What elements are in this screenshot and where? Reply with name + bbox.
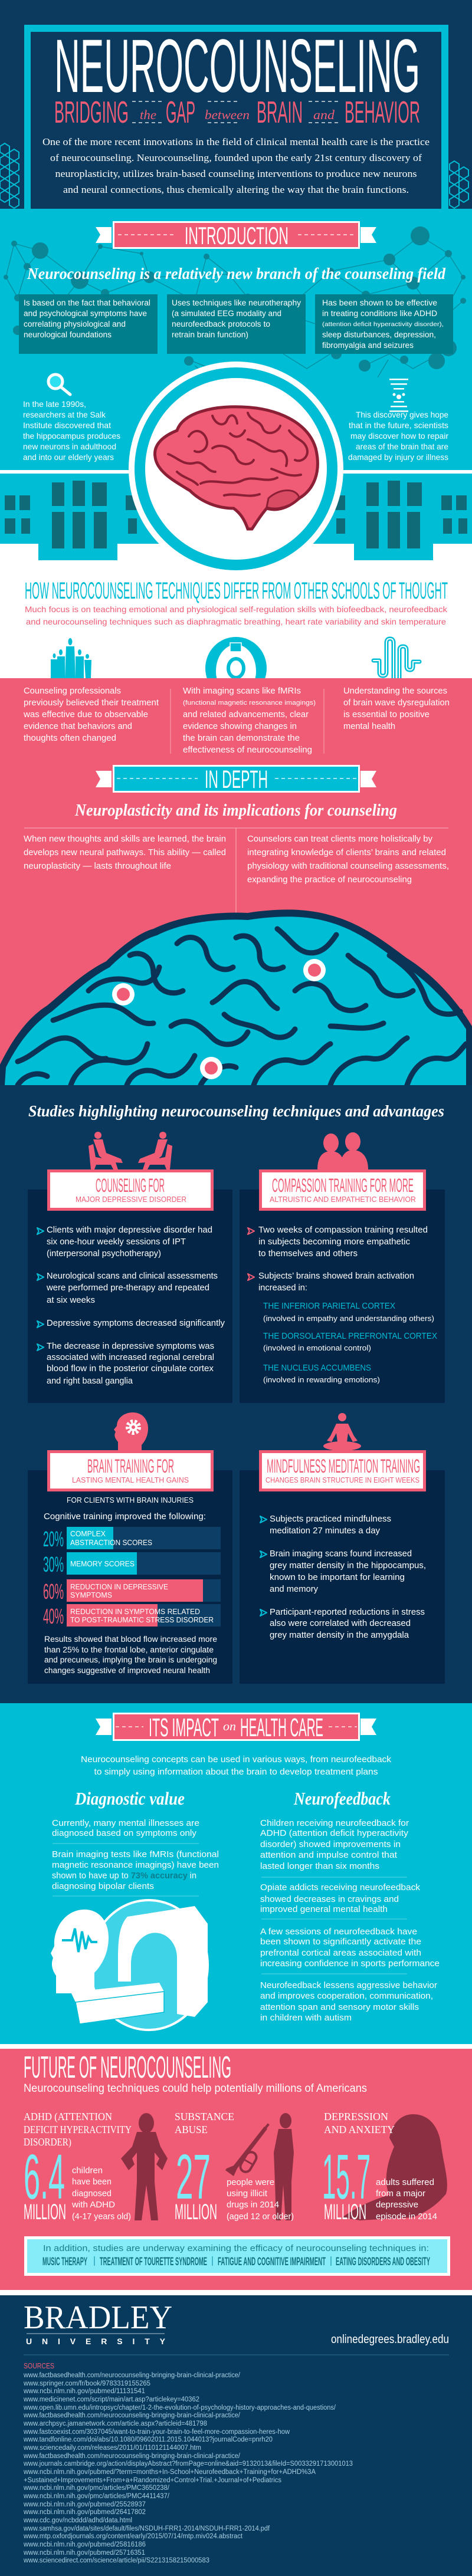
column: neurofeedback: disorder) showed improvements in [260, 1840, 401, 1849]
banner: its impact on health care [96, 1713, 376, 1742]
panel: counseling for major depressive disorder: COUNSELING FOR [96, 1175, 165, 1196]
sources list: www.archpsyc.jamanetwork.com/article.aspx?articleid=481798 [23, 2420, 207, 2427]
intro box 2: Uses techniques like neurotheraphy [172, 298, 301, 307]
panel: counseling for major depressive disorder: Clients with major depressive disorder had [47, 1225, 212, 1235]
text: salk institute: and into our elderly years [23, 452, 114, 462]
intro paragraph: of neurocounseling. Neurocounseling, founded upon the early 21st century discovery of [50, 152, 422, 163]
panel: brain training: LASTING MENTAL HEALTH GAINS [72, 1476, 189, 1484]
callout: studies underway: TREATMENT OF TOURETTE SYNDROME [100, 2256, 207, 2268]
sources list: www.fastcoexist.com/3037045/want-to-train-your-brain-to-feel-more-compassion-heres-how [23, 2429, 290, 2436]
sources list: www.ncbi.nlm.nih.gov/pmc/articles/PMC4411437/ [23, 2493, 170, 2500]
column: neurofeedback: lasted longer than six months [260, 1862, 379, 1871]
intro box 3 [315, 294, 453, 354]
impact intro text: Neurocounseling concepts can be used in various ways, from neurofeedback [81, 1755, 392, 1765]
intro box 2 [167, 294, 306, 354]
column: previously believed: thoughts often changed [24, 734, 116, 743]
panel: compassion training: in subjects becoming more empathetic [258, 1237, 410, 1247]
intro box 3: in treating conditions like ADHD [322, 309, 437, 318]
banner: its impact on health care: on [223, 1720, 236, 1733]
sources list: www.sciencedaily.com/releases/2011/01/110121144007.htm [23, 2444, 201, 2452]
intro box 2: retrain brain function) [172, 330, 248, 339]
sources list: www.cdc.gov/ncbddd/adhd/data.html [23, 2517, 132, 2524]
stat: depression and anxiety: adults suffered [376, 2177, 434, 2187]
subtitle: self-regulation skills [25, 604, 448, 626]
banner: its impact on health care: HEALTH CARE [240, 1713, 323, 1742]
sources list: www.ncbi.nlm.nih.gov/pubmed/25816186 [23, 2541, 146, 2548]
callout: studies underway: In addition, studies are underway examining the efficacy of neurocounseling techniques in: [43, 2243, 429, 2253]
text: salk institute: Institute discovered that [23, 420, 111, 430]
text: discovery gives hope: This discovery gives hope [356, 410, 448, 419]
stat: depression and anxiety [322, 2111, 447, 2224]
future section background [0, 2044, 472, 2290]
panel: counseling for major depressive disorder: blood flow in the posterior cingulate cortex [47, 1364, 214, 1374]
brain circle with pink brain [129, 362, 343, 576]
subtitle: bridging the gap between brain and behavior: BRIDGING [54, 96, 129, 130]
panel: brain training: BRAIN TRAINING FOR [87, 1455, 174, 1477]
subtitle: bridging the gap between brain and behavior: and [313, 107, 335, 122]
icon: brain wave [373, 639, 419, 678]
text: discovery gives hope: may discover how to repair [350, 431, 448, 441]
panel: mindfulness meditation: also were correlated with decreased [270, 1619, 411, 1628]
panel: compassion training: THE DORSOLATERAL PREFRONTAL CORTEX [263, 1331, 437, 1341]
panel: mindfulness meditation [240, 1413, 445, 1684]
column: neurofeedback: Children receiving neurofeedback for [260, 1819, 409, 1828]
bar chart: cognitive training results: 40% [43, 1604, 64, 1628]
stat: substance abuse: 27 [176, 2141, 211, 2212]
column: neurofeedback: ADHD (attention deficit hyperactivity [260, 1829, 409, 1838]
intro paragraph: One of the more recent innovations in the field of clinical mental health care is the practice [42, 136, 430, 147]
stat: substance abuse: SUBSTANCE [175, 2111, 234, 2122]
bar chart: cognitive training results: SYMPTOMS [70, 1591, 112, 1599]
sources list: www.sciencedirect.com/science/article/pii/S2213158215000583 [23, 2557, 209, 2564]
panel: brain training: Results showed that blood flow increased more [44, 1635, 217, 1644]
subtitle: self-regulation skills: Much focus is on teaching emotional and physiological self-regulation skills with biofeedback, neurofeedback [25, 604, 448, 614]
intro box 2: (a simulated EEG modality and [172, 309, 281, 318]
panel: compassion training: ALTRUISTIC AND EMPATHETIC BEHAVIOR [270, 1195, 416, 1204]
column: neurofeedback: A few sessions of neurofeedback have [260, 1927, 417, 1937]
panel: counseling for major depressive disorder: MAJOR DEPRESSIVE DISORDER [76, 1195, 186, 1204]
text: salk institute: In the late 1990s, [23, 399, 86, 409]
panel: compassion training: Two weeks of compassion training resulted [258, 1225, 428, 1235]
subtitle: bridging the gap between brain and behavior: GAP [166, 96, 195, 130]
intro box 2: neurofeedback protocols to [172, 320, 270, 328]
subtitle: bridging the gap between brain and behavior [54, 96, 420, 130]
icon: group of people [51, 638, 91, 678]
text: salk institute: the hippocampus produces [23, 431, 120, 441]
subtitle: self-regulation skills: and neurocounseling techniques such as diaphragmatic breathing, heart rate variability and skin temperature [26, 617, 446, 626]
column: neurofeedback: showed decreases in cravings and [260, 1895, 399, 1904]
intro box 3: sleep disturbances, depression, [322, 330, 436, 339]
panel: compassion training: increased in: [258, 1283, 307, 1293]
studies section background [0, 1085, 472, 1703]
stat: adhd: 6.4 [24, 2141, 65, 2212]
icon: magnifying glass [48, 374, 70, 395]
sources list: www.medicinenet.com/script/main/art.asp?articlekey=40362 [23, 2396, 199, 2403]
bar chart: cognitive training results: 30% [43, 1552, 64, 1576]
sources list: www.ncbi.nlm.nih.gov/pmc/articles/PMC3650238/ [23, 2485, 170, 2492]
sources list: www.factbasedhealth.com/neurocounseling-bringing-brain-clinical-practice/ [23, 2372, 241, 2379]
panel: compassion training: THE NUCLEUS ACCUMBENS [263, 1363, 371, 1373]
panel: mindfulness meditation: known to be important for learning [270, 1573, 405, 1582]
panel: compassion training: Subjects’ brains showed brain activation [258, 1271, 414, 1281]
bar chart: cognitive training results: ABSTRACTION SCORES [70, 1538, 152, 1547]
column: imaging scans: With imaging scans like fMRIs [183, 686, 301, 696]
text: discovery gives hope: damaged by injury or illness [348, 452, 448, 462]
stat: adhd: ADHD (ATTENTION [24, 2111, 112, 2123]
stat: adhd: DEFICIT HYPERACTIVITY [24, 2124, 132, 2135]
panel: counseling for major depressive disorder: at six weeks [47, 1296, 95, 1305]
bar chart: cognitive training results: 20% [43, 1527, 64, 1551]
column: imaging scans [183, 686, 316, 755]
text: neural pathways [24, 834, 226, 871]
column: diagnostic value [52, 1788, 219, 1896]
sources list: www.factbasedhealth.com/neurocounseling-bringing-brain-clinical-practice/ [23, 2453, 241, 2460]
column: brain wave dysregulation: Understanding the sources [343, 686, 447, 696]
bar chart: cognitive training results: TO POST-TRAUMATIC STRESS DISORDER [70, 1615, 214, 1624]
bar chart: cognitive training results: COMPLEX [70, 1529, 106, 1538]
text: holistic treatment: physiology with traditional counseling assessments, [247, 862, 449, 871]
panel: brain training [28, 1412, 232, 1684]
stat: adhd [24, 2111, 168, 2224]
panel: counseling for major depressive disorder: and right basal ganglia [47, 1376, 133, 1386]
icon: head with gear [114, 1412, 148, 1450]
panel: compassion training: (involved in emotional control) [263, 1343, 371, 1352]
column: diagnostic value: diagnosing bipolar clients [52, 1882, 154, 1891]
intro box 3: fibromyalgia and seizures [322, 341, 414, 350]
intro box 3: (attention deficit hyperactivity disorder), [322, 321, 444, 328]
buildings band and divider [0, 470, 472, 573]
header: background [0, 0, 472, 210]
stat: adhd: diagnosed [72, 2189, 112, 2199]
intro heading: Neurocounseling is a relatively new branch of the counseling field [27, 265, 445, 282]
big brain illustration [0, 909, 472, 1085]
illustration: mri scanner with head [51, 1900, 208, 2030]
column: neurofeedback: and improves cooperation, communication, [260, 1992, 433, 2001]
column: previously believed: evidence that behaviors and [24, 722, 132, 731]
panel: counseling for major depressive disorder: Depressive symptoms decreased significantly [47, 1319, 225, 1328]
column: imaging scans: evidence showing changes in [183, 722, 297, 731]
stat: adhd: (4-17 years old) [72, 2212, 131, 2222]
bar chart: cognitive training results [43, 1527, 221, 1628]
panel: mindfulness meditation: grey matter density in the hippocampus, [270, 1561, 426, 1570]
impact intro text [81, 1755, 392, 1777]
column: brain wave dysregulation: is essential to positive [343, 710, 430, 719]
stat: substance abuse: people were [227, 2177, 274, 2187]
studies heading: Studies highlighting neurocounseling techniques and advantages [28, 1102, 444, 1120]
text: holistic treatment [247, 834, 449, 885]
banner: in depth [96, 765, 376, 794]
column: neurofeedback: attention and impulse control that [260, 1851, 397, 1860]
text: salk institute [23, 399, 120, 462]
stat: adhd: MILLION [24, 2200, 66, 2224]
icon: mri scanner [205, 637, 267, 699]
bar chart: cognitive training results: MEMORY SCORES [70, 1559, 135, 1568]
panel: counseling for major depressive disorder: (interpersonal psychotherapy) [47, 1249, 161, 1259]
column: previously believed [23, 686, 159, 743]
column: previously believed: was effective due to observable [23, 710, 148, 719]
panel: mindfulness meditation: and memory [270, 1585, 319, 1594]
sources list: www.ncbi.nlm.nih.gov/pubmed/?term=months+In-School+Neurofeedback+Training+for+ADHD%3A [23, 2469, 316, 2476]
stat: substance abuse: ABUSE [175, 2124, 208, 2135]
column: imaging scans: and related advancements, clear [183, 710, 309, 719]
column: neurofeedback: Neurofeedback lessens aggressive behavior [260, 1981, 437, 1990]
panel: brain training: and precuneus, implying the brain is undergoing [44, 1655, 217, 1664]
stat: adhd: children [72, 2166, 103, 2176]
intro paragraph: and neural connections, thus chemically altering the way that the brain functions. [63, 184, 409, 195]
stat: depression and anxiety: depressive [376, 2200, 418, 2210]
panel: counseling for major depressive disorder: were performed pre-therapy and repeated [46, 1283, 209, 1293]
icon: dna [389, 379, 408, 412]
panel: brain training: Cognitive training improved the following: [44, 1512, 206, 1522]
text: discovery gives hope: areas of the brain that are [356, 442, 448, 451]
logo: bradley university: UNIVERSITY [26, 2337, 166, 2346]
column: previously believed: Counseling professionals [24, 686, 121, 696]
icon: sitting woman [342, 2114, 447, 2220]
column: brain wave dysregulation: of brain wave dysregulation [343, 698, 450, 708]
stat: depression and anxiety: 15.7 [322, 2141, 371, 2212]
column: neurofeedback: been shown to significantly activate the [260, 1937, 421, 1947]
bar chart: cognitive training results: REDUCTION IN DEPRESSIVE [70, 1582, 168, 1591]
sources list: www.ncbi.nlm.nih.gov/pubmed/26417802 [23, 2509, 146, 2516]
sources list: +Sustained+Improvements+From+a+Randomized+Control+Trial.+Journal+of+Pediatrics [24, 2477, 281, 2484]
sources list [23, 2361, 353, 2564]
banner: its impact on health care: ITS IMPACT [149, 1713, 219, 1742]
panel: compassion training: (involved in rewarding emotions) [263, 1375, 380, 1384]
stat: depression and anxiety: MILLION [324, 2200, 366, 2224]
sources list: www.springer.com/fr/book/9783319155265 [23, 2380, 150, 2387]
panel: counseling for major depressive disorder: The decrease in depressive symptoms was [47, 1342, 214, 1351]
sources list: www.ncbi.nlm.nih.gov/pubmed/25716351 [23, 2549, 145, 2557]
intro paragraph: neuroplasticity, utilizes brain-based counseling interventions to produce new neurons [55, 168, 417, 179]
introduction section background with neural network [0, 209, 472, 470]
stat: depression and anxiety: DEPRESSION [324, 2111, 388, 2122]
text: neural pathways: develops new neural pathways. This ability — called [24, 848, 226, 857]
intro box 1: Is based on the fact that behavioral [24, 298, 150, 307]
panel: mindfulness meditation: Participant-reported reductions in stress [270, 1608, 425, 1617]
stat: adhd: DISORDER) [24, 2136, 71, 2148]
column: neurofeedback: Neurofeedback [293, 1788, 391, 1809]
subtitle: bridging the gap between brain and behavior: the [140, 107, 156, 122]
pink section background [0, 678, 472, 1085]
column: previously believed: previously believed their treatment [24, 698, 159, 708]
bar chart: cognitive training results: REDUCTION IN SYMPTOMS RELATED [70, 1607, 200, 1616]
text: holistic treatment: integrating knowledge of clients’ brains and related [247, 848, 446, 857]
sources list: www.ncbi.nlm.nih.gov/pubmed/25528937 [23, 2501, 146, 2508]
bar chart: cognitive training results: 60% [43, 1579, 64, 1604]
panel: compassion training: THE INFERIOR PARIETAL CORTEX [263, 1301, 395, 1311]
column: neurofeedback: Opiate addicts receiving neurofeedback [260, 1883, 421, 1892]
column: neurofeedback: improved general mental health [260, 1905, 388, 1914]
intro paragraph [42, 136, 430, 195]
banner: introduction [96, 221, 376, 249]
panel: compassion training: to themselves and others [258, 1249, 358, 1259]
icon: two seated people [88, 1132, 172, 1169]
sources list: www.open.lib.umn.edu/intropsyc/chapter/1-2-the-evolution-of-psychology-history-approaches-and-questions/ [23, 2404, 336, 2411]
panel: counseling for major depressive disorder: six one-hour weekly sessions of IPT [47, 1237, 186, 1247]
stat: adhd: with ADHD [71, 2200, 115, 2210]
footer url: onlinedegrees.bradley.edu [331, 2333, 449, 2346]
text: neural pathways: neuroplasticity — lasts throughout life [24, 862, 171, 871]
text: holistic treatment: expanding the practice of neurocounseling [247, 875, 412, 885]
panel: counseling for major depressive disorder: Neurological scans and clinical assessments [47, 1271, 218, 1281]
intro box 1: and psychological symptoms have [24, 309, 147, 318]
text: salk institute: researchers at the Salk [23, 410, 106, 419]
column: diagnostic value: shown to have up to 73% accuracy in [52, 1871, 196, 1881]
intro box 1: correlating physiological and [24, 320, 126, 328]
panel: mindfulness meditation: Brain imaging scans found increased [270, 1549, 412, 1559]
callout: studies underway [24, 2236, 450, 2276]
intro box 1: neurological foundations [24, 330, 112, 339]
stat: depression and anxiety: AND ANXIETY [324, 2124, 395, 2135]
text: salk institute: new neurons in adulthood [23, 442, 116, 451]
subtitle: bridging the gap between brain and behavior: BRAIN [257, 96, 303, 130]
subtitle: bridging the gap between brain and behavior: between [205, 107, 250, 122]
icon: syringe, pill and man [225, 2113, 294, 2220]
stat: substance abuse: using illicit [227, 2189, 268, 2199]
banner: introduction: INTRODUCTION [185, 222, 289, 249]
column: imaging scans: (functional magnetic resonance imagings) [183, 699, 316, 707]
panel: mindfulness meditation: CHANGES BRAIN STRUCTURE IN EIGHT WEEKS [266, 1476, 419, 1484]
text: discovery gives hope: that in the future, scientists [349, 420, 448, 430]
callout: studies underway: MUSIC THERAPY [42, 2256, 87, 2268]
column: diagnostic value: magnetic resonance imagings) have been [52, 1861, 219, 1870]
impact intro text: to simply using information about the brain to develop treatment plans [94, 1767, 378, 1777]
sources list: www.journals.cambridge.org/action/displayAbstract?fromPage=online&aid=9132013&fileId=S0033291713001013 [23, 2460, 353, 2467]
panel: mindfulness meditation: grey matter density in the amygdala [270, 1631, 409, 1640]
icon: child silhouette [121, 2113, 168, 2220]
column: diagnostic value: Currently, many mental illnesses are [52, 1819, 199, 1828]
panel: counseling for major depressive disorder: associated with increased regional cerebral [47, 1353, 214, 1362]
in depth heading: Neuroplasticity and its implications for counseling [74, 801, 397, 820]
column: brain wave dysregulation [343, 686, 450, 731]
panel: compassion training: (involved in empathy and understanding others) [263, 1314, 434, 1323]
sources list: www.samhsa.gov/data/sites/default/files/NSDUH-FRR1-2014/NSDUH-FRR1-2014.pdf [23, 2525, 270, 2532]
column: diagnostic value: Brain imaging tests like fMRIs (functional [52, 1850, 219, 1859]
stat: substance abuse: drugs in 2014 [227, 2200, 279, 2210]
sources list: www.tandfonline.com/doi/abs/10.1080/09602011.2015.1044013?journalCode=pnrh20 [23, 2436, 273, 2443]
sources list: SOURCES [24, 2361, 54, 2370]
intro box 1 [19, 294, 158, 354]
panel: mindfulness meditation: meditation 27 minutes a day [270, 1526, 381, 1536]
column: neurofeedback [260, 1788, 440, 2023]
column: imaging scans: the brain can demonstrate the [183, 734, 300, 743]
column: brain wave dysregulation: mental health [343, 722, 395, 731]
column: diagnostic value: Diagnostic value [74, 1788, 185, 1809]
stat: adhd: have been [72, 2177, 112, 2187]
sources list: www.factbasedhealth.com/neurocounseling-bringing-brain-clinical-practice/ [23, 2412, 241, 2419]
panel: brain training: than 25% to the frontal lobe, anterior cingulate [44, 1645, 214, 1654]
text: neural pathways: When new thoughts and skills are learned, the brain [24, 834, 226, 844]
sources list: www.mtp.oxfordjournals.org/content/early/2015/07/14/mtp.miv024.abstract [23, 2533, 243, 2540]
sources list: www.ncbi.nlm.nih.gov/pubmed/11131541 [23, 2388, 145, 2395]
stat: depression and anxiety: episode in 2014 [376, 2212, 437, 2222]
footer background [0, 2290, 472, 2576]
panel: mindfulness meditation: Subjects practiced mindfulness [270, 1514, 391, 1524]
text: holistic treatment: Counselors can treat clients more holistically by [247, 834, 433, 844]
stat: substance abuse: (aged 12 or older) [227, 2212, 294, 2222]
future subtitle: Neurocounseling techniques could help potentially millions of Americans [24, 2082, 367, 2095]
icon: two heads [317, 1132, 368, 1169]
column: neurofeedback: attention span and sensory motor skills [260, 2003, 419, 2012]
column: neurofeedback: increasing confidence in sports performance [260, 1959, 440, 1969]
stat: depression and anxiety: from a major [376, 2189, 425, 2199]
panel: counseling for major depressive disorder [28, 1132, 232, 1403]
column: neurofeedback: in children with autism [260, 2013, 352, 2023]
logo: bradley university: BRADLEY [24, 2299, 172, 2336]
callout: studies underway: FATIGUE AND COGNITIVE IMPAIRMENT [218, 2256, 326, 2268]
panel: compassion training [240, 1132, 445, 1403]
panel: brain training: FOR CLIENTS WITH BRAIN INJURIES [67, 1496, 194, 1504]
text: discovery gives hope [348, 410, 448, 462]
stat: substance abuse [175, 2111, 294, 2224]
panel: brain training: changes suggestive of improved neural health [44, 1666, 210, 1675]
column: neurofeedback: prefrontal cortical areas associated with [260, 1949, 421, 1958]
icon: meditating person [323, 1413, 361, 1451]
impact section background [0, 1703, 472, 2045]
intro box 3: Has been shown to be effective [322, 298, 437, 307]
column: imaging scans: effectiveness of neurocounseling [183, 745, 312, 755]
column: diagnostic value: diagnosed based on symptoms only [52, 1829, 197, 1838]
banner: in depth: IN DEPTH [205, 765, 268, 794]
stat: substance abuse: MILLION [175, 2200, 217, 2224]
